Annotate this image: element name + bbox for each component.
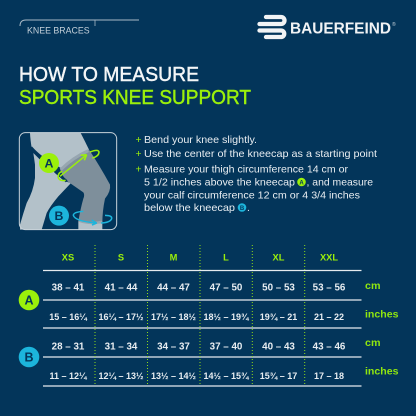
row A inches: 15 – 16¼ — [49, 312, 88, 322]
table rules — [43, 270, 362, 386]
unit labels — [365, 281, 399, 378]
arrow: calf measure — [73, 211, 112, 225]
bullet 3: , and measure — [306, 178, 373, 188]
bullet 3: B — [240, 206, 245, 212]
bullet 3: your calf circumference 12 cm or 4 3/4 inches — [144, 190, 360, 201]
row A cm: 44 – 47 — [157, 282, 190, 293]
badge B: B — [55, 209, 64, 223]
row A inches: 21 – 22 — [314, 312, 344, 322]
category tab: knee braces — [20, 20, 139, 36]
bullet 3: + — [136, 164, 142, 176]
row B inches — [49, 371, 344, 381]
title — [19, 64, 251, 109]
row B cm: 37 – 40 — [210, 342, 243, 352]
strap line behind thigh — [31, 147, 67, 181]
row A cm: 53 – 56 — [313, 282, 346, 293]
size headers: L — [223, 252, 229, 262]
bullet 3: A — [299, 180, 304, 186]
knee support sleeve — [60, 150, 110, 224]
size headers: XL — [273, 252, 285, 262]
icon: logo stripes — [260, 17, 285, 37]
row badge B: B — [24, 350, 34, 364]
title: SPORTS KNEE SUPPORT — [19, 87, 251, 109]
bullet 2: Use the center of the kneecap as a starting point — [144, 149, 377, 160]
row A cm: 41 – 44 — [105, 282, 138, 293]
row A inches: 18½ – 19¾ — [203, 312, 250, 322]
sleeve bottom band — [79, 221, 102, 223]
row badge B — [19, 347, 39, 367]
size headers: XS — [62, 252, 74, 262]
bullet 3: Measure your thigh circumference 14 cm or — [144, 164, 349, 176]
row B inches: 17 – 18 — [314, 371, 344, 381]
row B inches: 15¾ – 17 — [260, 371, 297, 381]
calf below support — [78, 221, 102, 230]
badge A: A — [45, 156, 54, 170]
size headers — [62, 252, 338, 262]
instructions list — [136, 135, 377, 214]
unit labels: inches — [365, 366, 399, 378]
brand logo: Bauerfeind: BAUERFEIND — [290, 20, 391, 37]
row B inches: 13½ – 14½ — [151, 371, 197, 381]
row badge A: A — [24, 294, 34, 308]
row B inches: 12¼ – 13½ — [98, 371, 144, 381]
bullet 3 — [136, 164, 373, 214]
row B cm: 40 – 43 — [262, 342, 295, 352]
row badge A — [19, 290, 39, 310]
sleeve top band — [61, 151, 88, 170]
unit labels: cm — [365, 281, 381, 292]
lower rear leg — [20, 153, 71, 230]
row A cm: 38 – 41 — [52, 282, 85, 293]
bullet 3: below the kneecap — [144, 203, 235, 214]
panel: knee illustration — [19, 133, 117, 230]
bullet 3: . — [247, 203, 250, 214]
row B cm: 28 – 31 — [52, 342, 85, 352]
row A inches: 19¾ – 21 — [260, 312, 297, 322]
row A cm: 50 – 53 — [262, 282, 295, 293]
size headers: M — [170, 252, 178, 262]
row A cm: 47 – 50 — [210, 282, 243, 293]
bullet 3: 5 1/2 inches above the kneecap — [144, 178, 295, 188]
row B cm: 34 – 37 — [157, 342, 190, 352]
row A inches — [49, 312, 344, 322]
unit labels: cm — [365, 338, 381, 349]
size table — [19, 245, 399, 386]
frame — [19, 133, 117, 230]
bullet 2: + — [136, 149, 142, 160]
brand logo: Bauerfeind — [260, 17, 396, 37]
row A inches: 17½ – 18½ — [151, 312, 197, 322]
bullet 1: + — [136, 135, 142, 146]
size headers: XXL — [320, 252, 338, 262]
row B inches: 11 – 12¼ — [49, 371, 88, 381]
column dividers — [95, 245, 305, 386]
upper thigh — [30, 133, 89, 169]
category tab: knee braces: KNEE BRACES — [27, 26, 90, 36]
row B cm: 43 – 46 — [313, 342, 346, 352]
row B cm — [52, 342, 346, 352]
row A cm — [52, 282, 346, 293]
bullet 1: Bend your knee slightly. — [144, 135, 257, 146]
title: HOW TO MEASURE — [19, 64, 199, 86]
row B inches: 14½ – 15¾ — [203, 371, 250, 381]
size headers: S — [118, 252, 124, 262]
brand logo: Bauerfeind: ® — [392, 21, 396, 28]
arrow: thigh measure — [58, 150, 99, 181]
row B cm: 31 – 34 — [105, 342, 138, 352]
unit labels: inches — [365, 310, 399, 320]
row A inches: 16¼ – 17½ — [98, 312, 144, 322]
